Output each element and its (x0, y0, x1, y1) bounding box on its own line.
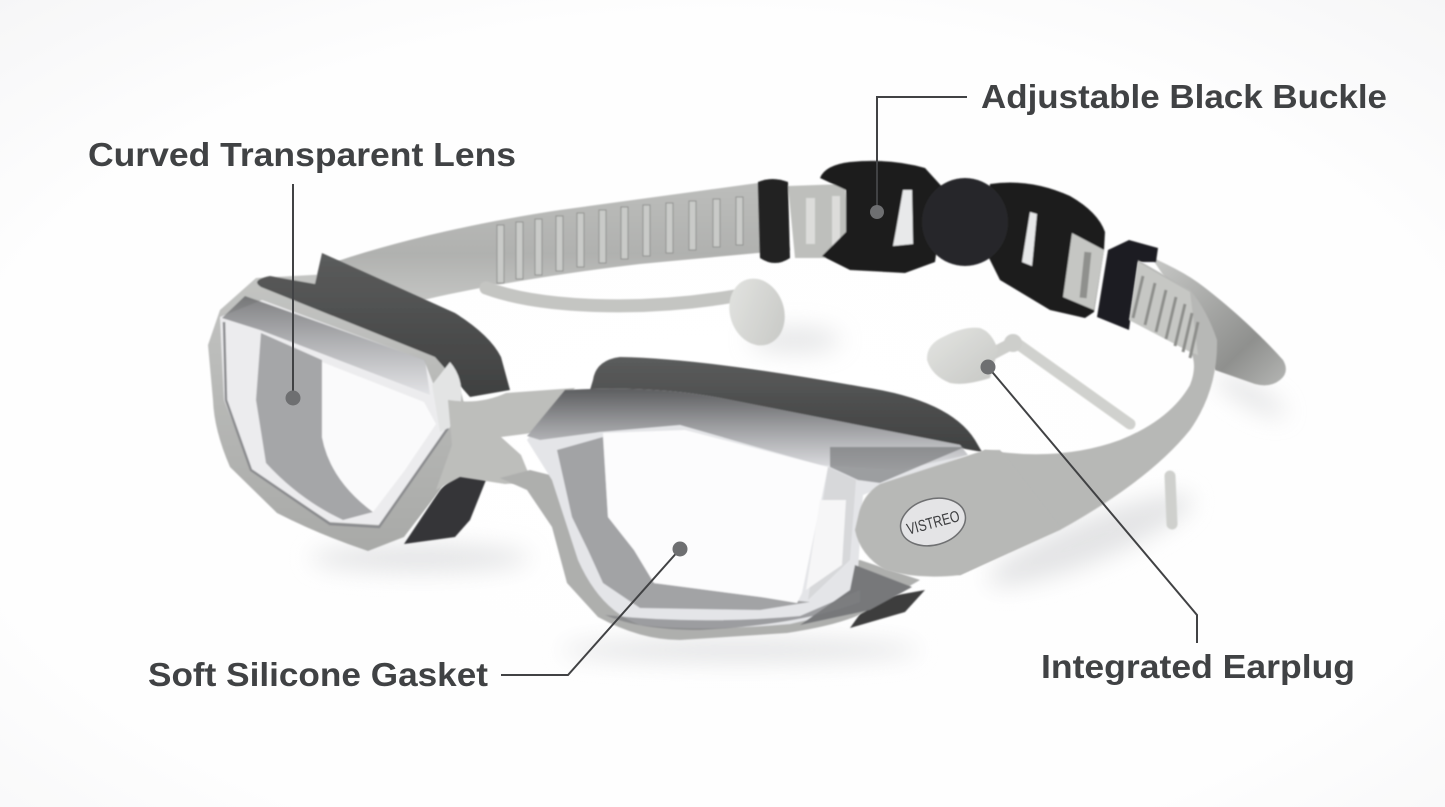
right lens body (527, 389, 968, 628)
left earplug (486, 271, 793, 353)
back strap with ribs (335, 182, 790, 302)
callout: Adjustable Black Buckle (870, 78, 1387, 219)
right clear area (603, 430, 828, 603)
right buckle strap piece (1063, 233, 1104, 310)
strap tongue (1151, 257, 1286, 385)
right lens assembly: soft silicone gasket (500, 357, 982, 640)
buckle disc (922, 178, 1008, 266)
strap keeper (758, 179, 790, 263)
callout: Curved Transparent Lens: Curved Transparent Lens (88, 136, 516, 173)
logo badge (895, 491, 971, 553)
right buckle slot (1022, 212, 1037, 266)
nose bridge (436, 388, 575, 490)
left lens rim (224, 322, 448, 527)
rear gaskets (404, 470, 925, 628)
right keeper (1097, 240, 1158, 330)
right earplug (927, 328, 1172, 524)
left lens glass (220, 300, 450, 525)
right inner gasket (557, 437, 810, 610)
left clear area (322, 362, 436, 512)
callout: Integrated Earplug (980, 360, 1355, 685)
left buckle frame (820, 161, 945, 273)
logo text: VISTREO (905, 508, 962, 539)
ground shadows (310, 328, 1290, 662)
left inner gasket (256, 333, 373, 520)
callout: Adjustable Black Buckle: Adjustable Black Buckle (981, 78, 1387, 115)
right ribbed band and temple arm (860, 260, 1217, 575)
buckle strap section (788, 184, 850, 258)
left top gasket (257, 253, 510, 397)
right buckle frame (985, 182, 1105, 318)
left buckle slot (893, 190, 913, 246)
callout: Soft Silicone Gasket (148, 542, 688, 693)
callout: Integrated Earplug: Integrated Earplug (1041, 648, 1355, 685)
right lens side reflections (808, 467, 856, 600)
right top gasket (590, 357, 982, 452)
temple piece with logo (855, 450, 1060, 577)
right frame bottom (500, 470, 920, 640)
left lens assembly: curved transparent lens (208, 253, 510, 551)
buckle: adjustable black buckle (758, 161, 1158, 330)
left outer frame (208, 274, 470, 551)
callout: Soft Silicone Gasket: Soft Silicone Gasket (148, 656, 488, 693)
callout: Curved Transparent Lens (88, 136, 516, 406)
